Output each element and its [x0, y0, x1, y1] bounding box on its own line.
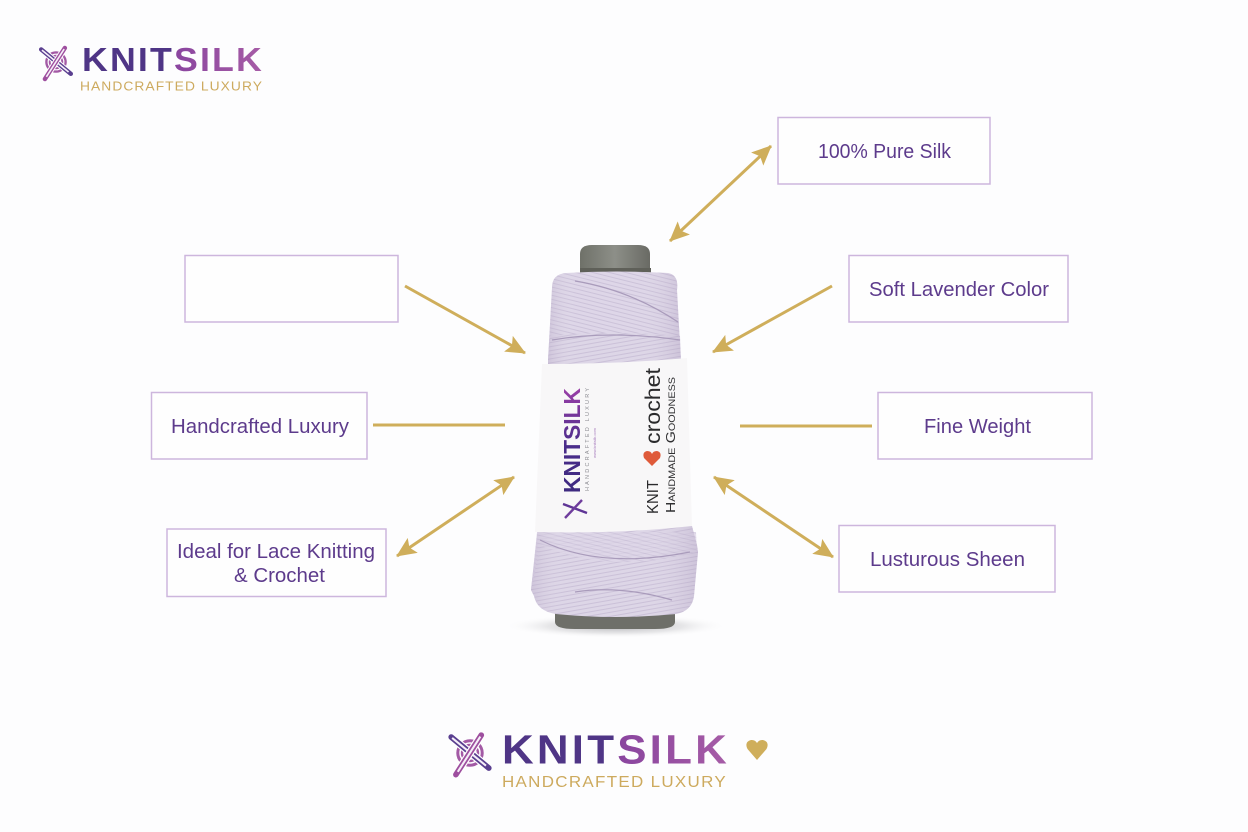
callout: Soft Lavender Color [849, 256, 1068, 322]
callout: Fine Weight: Fine Weight [924, 416, 1031, 438]
arrow: soft lavender to spool [713, 286, 832, 352]
yarn body upper [548, 272, 681, 380]
label slogan: crochet [642, 368, 665, 444]
callout: blank box [185, 256, 398, 322]
top core [580, 245, 650, 275]
paper label [535, 358, 692, 532]
arrow: fine weight line [740, 424, 872, 428]
brand name: KNITSILK [502, 726, 730, 772]
yarn chevron band upper [548, 333, 681, 380]
arrow: pure silk double [670, 146, 771, 241]
tagline: HANDCRAFTED LUXURY [502, 774, 727, 791]
label logo: HANDCRAFTED LUXURY [585, 388, 591, 491]
brand name: KNITSILK [82, 41, 264, 78]
callout: Lusturous Sheen: Lusturous Sheen [870, 549, 1025, 571]
callout: Ideal for Lace Knitting & Crochet: Ideal for Lace Knitting [177, 541, 375, 563]
callout: Ideal for Lace Knitting & Crochet [167, 529, 386, 596]
callout: Lusturous Sheen [839, 526, 1055, 592]
label logo [559, 388, 597, 518]
callout: Fine Weight [878, 392, 1092, 459]
bottom core [555, 606, 675, 629]
arrow: lusturous double [714, 477, 833, 557]
label logo: KNITSILK [559, 388, 585, 493]
yarn band lower [531, 532, 697, 590]
callout: 100% Pure Silk: 100% Pure Silk [818, 141, 952, 163]
callout: Soft Lavender Color: Soft Lavender Color [869, 279, 1049, 301]
label logo: www.knitsilk.com [592, 427, 597, 458]
callout: 100% Pure Silk [778, 118, 990, 184]
core rim [580, 268, 651, 273]
label slogan: Handmade Goodness [663, 377, 678, 513]
floor shadow [504, 614, 728, 638]
callout: Ideal for Lace Knitting & Crochet: & Crochet [234, 565, 325, 587]
arrow: ideal for lace double [397, 477, 514, 556]
label slogan [642, 368, 678, 514]
logo: bottom center [451, 726, 768, 791]
label slogan: KNIT [645, 480, 662, 514]
arrow: blank box to spool [405, 286, 525, 353]
icon: yarn ball with crossed needles [41, 48, 71, 79]
thread highlights [540, 281, 690, 600]
logo: top left [41, 41, 264, 94]
yarn shading upper [548, 272, 681, 380]
icon: yarn ball with crossed needles [451, 735, 489, 775]
product: yarn spool [504, 245, 728, 638]
arrow: handcrafted line [373, 424, 505, 426]
yarn shading lower [531, 526, 698, 617]
yarn body lower [531, 526, 698, 617]
callout: Handcrafted Luxury [152, 392, 367, 459]
tagline: HANDCRAFTED LUXURY [80, 78, 263, 94]
callout: Handcrafted Luxury: Handcrafted Luxury [171, 416, 349, 438]
icon: gold heart [746, 740, 768, 760]
